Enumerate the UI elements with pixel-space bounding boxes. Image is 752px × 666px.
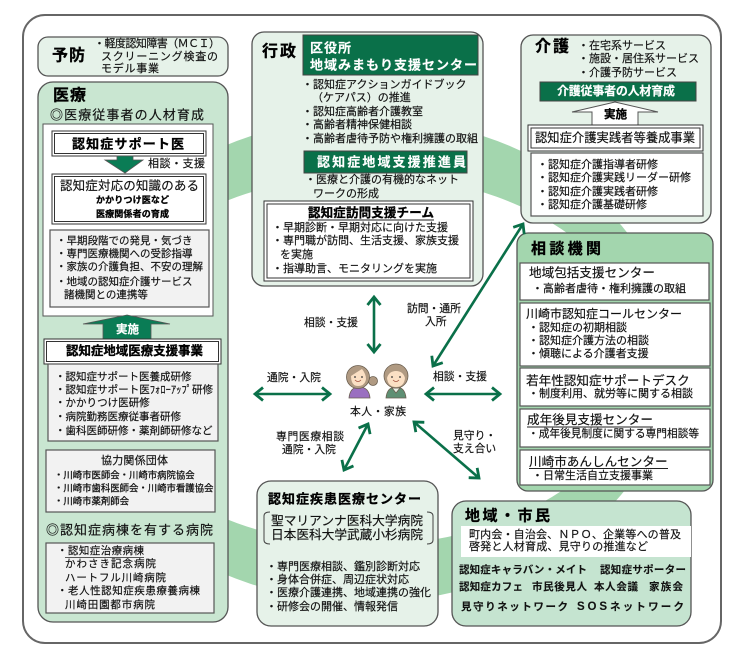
panel: nursing care [521,35,711,223]
list: roles of support doctors: 諸機関との連携等 [64,288,148,301]
box: dementia support doctor [52,131,206,156]
text: prevention details [94,36,220,75]
list: administration services: （ケアパス）の推進 [312,90,411,104]
text: promoter role: ワークの形成 [313,187,379,200]
panel: administration [252,32,483,286]
arrow: person to community [414,422,479,478]
list: center functions: ・研修会の開催、情報発信 [266,599,398,613]
text: prevention details: スクリーニング検査の [101,49,218,63]
arrow: consultation agencies to person [433,224,523,366]
list: medical training courses [48,364,218,441]
text: prevention details: モデル事業 [101,61,159,75]
text: community activities [461,526,691,557]
box: dementia visiting support team: ・指導助言、モニタリングを実施 [272,261,437,275]
background ring [61,118,673,602]
list: center functions: ・専門医療相談、鑑別診断対応 [266,559,420,573]
list: hospitals: ・認知症治療病棟 [57,544,144,557]
panel: community and citizens [452,501,691,626]
panel: medical care [38,82,228,622]
text: promoter role: ・医療と介護の有機的なネット [305,172,459,186]
icon: elderly woman [346,366,378,398]
list: center functions: ・身体合併症、周辺症状対応 [266,572,409,586]
box: dementia call center [520,303,710,366]
banner: care worker training: 介護従事者の人材育成 [557,83,675,98]
banner: ward office community center: 区役所 [310,40,351,56]
arrow: implementation: 実施 [604,107,627,121]
arrow: person to consultation agencies [426,393,500,395]
panel: prevention [38,36,228,76]
list: administration services: ・高齢者精神保健相談 [302,117,412,131]
list: partner organizations: 協力関係団体 [101,453,168,467]
list: medical training courses: ・歯科医師研修・薬剤師研修など [55,424,213,437]
label: specialist consultation: 専門医療相談 [276,429,344,443]
white panel: dementia support doctor [43,124,213,316]
heading: administration: 行政 [262,42,296,60]
box: dementia visiting support team: 認知症訪問支援チーム [308,205,434,220]
list: center functions: ・医療介護連携、地域連携の強化 [266,585,431,599]
label: visits and admission: 訪問・通所 [407,302,461,315]
list: community programs: 市民後見人 [532,580,588,593]
list: partner organizations: ・川崎市医師会・川崎市病院協会 [54,470,195,480]
box: regional dementia medical support program [44,339,221,364]
box: training of family doctors: 認知症対応の知識のある [60,179,199,193]
box: anshin center: 川崎市あんしんセンター [529,455,668,469]
box: adult guardianship support center: ・成年後見制度に関する専門相談等 [528,427,699,440]
box: anshin center [520,450,710,485]
heading: prevention: 予防 [52,46,85,64]
box: dementia call center: 川崎市認知症コールセンター [526,307,682,321]
list: administration services: ・高齢者虐待予防や権利擁護の取組 [302,131,478,145]
label: visits and admission [407,302,461,328]
box: early-onset dementia support desk [520,368,710,406]
list: roles of support doctors: ・専門医療機関への受診指導 [56,247,193,260]
banner: dementia community support promoter [304,151,467,173]
box: dementia visiting support team: ・早期診断・早期対応に向けた支援 [272,220,448,234]
label: visits and admission: 入所 [425,315,447,328]
heading: medical care: 医療 [53,86,86,104]
label: watching over and mutual support: 見守り・ [453,429,496,442]
list: medical training courses: ・かかりつけ医研修 [55,396,150,409]
heading: nursing care: 介護 [535,38,569,56]
text: designated hospitals: 日本医科大学武蔵小杉病院 [271,527,423,542]
list: hospitals: 川崎田園都市病院 [65,598,156,611]
list: community programs: 家族会 [649,580,684,593]
box: early-onset dementia support desk: 若年性認知症サポートデスク [526,373,690,388]
text: community activities: 町内会・自治会、ＮＰＯ、企業等への普及 [469,527,681,541]
list: community programs: SOS [577,601,607,613]
list: partner organizations: ・川崎市薬剤師会 [54,496,130,506]
list: roles of support doctors: ・家族の介護負担、不安の理解 [56,260,203,273]
list: medical training courses: ・認知症サポート医養成研修 [55,370,192,383]
label: specialist consultation [276,429,344,456]
heading: community and citizens: 地域・市民 [465,506,550,524]
list: care training courses: ・認知症介護実践リーダー研修 [537,170,691,184]
box: dementia visiting support team: を実施 [280,248,313,261]
list: care training courses: ・認知症介護基礎研修 [537,197,647,211]
list: community programs: 見守りネットワーク [461,600,568,613]
box: dementia visiting support team [264,201,473,281]
list: care training courses: ・認知症介護実践者研修 [537,184,658,198]
box: community general support center: ・高齢者虐待・権利擁護の取組 [532,281,686,295]
banner: ward office community center [303,35,478,75]
panel: dementia medical center [257,481,438,626]
list: administration services: ・認知症アクションガイドブック [302,77,466,91]
label: outpatient and admission, left: 通院・入院 [267,371,321,384]
box: dementia call center: ・認知症介護方法の相談 [528,333,649,347]
banner: ward office community center: 地域みまもり支援センター [310,58,477,72]
arrow: administration to person [373,297,375,352]
list: roles of support doctors: ・地域の認知症介護サービス [56,275,192,288]
banner: care worker training [540,82,696,101]
arrow: implementation up: 実施 [116,322,139,336]
box: community general support center: 地域包括支援センター [529,266,655,280]
list: care services: ・施設・居住系サービス [578,51,699,65]
list: administration services [302,77,478,145]
subheading: hospitals with dementia wards: ◎認知症病棟を有する病院 [46,522,213,538]
arrow: implementation [572,102,658,125]
list: care services: ・介護予防サービス [578,65,677,79]
arrow: down to family doctors [105,156,143,173]
label: consultation and support, right: 相談・支援 [433,369,487,383]
box: training of family doctors [52,174,206,224]
banner: dementia community support promoter: 認知症地域支援推進員 [317,154,466,170]
box: dementia call center: ・傾聴による介護者支援 [528,346,649,360]
label: specialist consultation: 通院・入院 [282,443,336,456]
label: watching over and mutual support [453,429,496,455]
box: dementia support doctor: 認知症サポート医 [72,136,184,152]
box: community general support center [520,263,709,300]
arrow: person to medical center [344,424,368,470]
text: designated hospitals [264,512,433,544]
text: promoter role [305,172,459,200]
box: training of family doctors: かかりつけ医など [96,194,169,205]
list: care training courses [531,153,703,216]
box: dementia visiting support team: ・専門職が訪問、生活支援、家族支援 [272,233,459,247]
list: hospitals: ハートフル川崎病院 [65,571,166,584]
label: person and family: 本人・家族 [350,404,406,418]
list: roles of support doctors [50,230,209,307]
subheading: medical staff training: ◎医療従事者の人材育成 [50,108,204,122]
box: anshin center: ・日常生活自立支援事業 [532,468,653,482]
list: medical training courses: ・病院勤務医療従事者研修 [55,410,181,423]
box: regional dementia medical support program: 認知症地域医療支援事業 [66,343,203,358]
list: care services [578,39,699,79]
list: partner organizations [46,450,215,512]
box: adult guardianship support center: 成年後見支援センター [527,413,653,427]
icon: elderly man [384,364,408,398]
label: consultation and support, top: 相談・支援 [304,315,358,329]
list: hospitals: ・老人性認知症疾患療養病棟 [57,584,200,597]
box: dementia care practitioner program [528,125,703,151]
label: consultation and support: 相談・支援 [148,156,205,170]
list: community programs: 認知症カフェ [459,580,523,593]
box: adult guardianship support center [520,409,710,447]
list: community programs: 認知症サポーター [600,563,686,576]
text: prevention details: ・軽度認知障害（ＭＣＩ） [94,36,220,50]
list: partner organizations: ・川崎市歯科医師会・川崎市看護協会 [54,482,214,494]
list: community programs: ネットワーク [610,601,684,613]
heading: consultation agencies: 相談機関 [531,240,601,258]
list: medical training courses: ・認知症サポート医ﾌｫﾛｰｱｯﾌﾟ研修 [55,383,214,396]
list: hospitals [46,543,214,613]
list: community programs: 認知症キャラバン・メイト [459,563,587,576]
text: community activities: 啓発と人材育成、見守りの推進など [469,539,648,553]
list: center functions [266,559,431,613]
label: watching over and mutual support: 支え合い [453,442,496,455]
box: dementia care practitioner program: 認知症介護実践者等養成事業 [535,130,695,145]
arrow: medical care to person [255,393,330,395]
list: community programs [459,563,686,613]
panel: consultation agencies [517,233,713,491]
list: care training courses: ・認知症介護指導者研修 [537,157,658,171]
text: designated hospitals: 聖マリアンナ医科大学病院 [271,513,423,528]
box: training of family doctors: 医療関係者の育成 [96,208,169,219]
box: early-onset dementia support desk: ・制度利用、就労等に関する相談 [528,386,693,400]
box: dementia call center: ・認知症の初期相談 [528,320,627,334]
arrow: implementation up [83,315,170,339]
list: roles of support doctors: ・早期段階での発見・気づき [56,234,192,247]
list: care services: ・在宅系サービス [578,39,666,52]
list: hospitals: かわさき記念病院 [65,558,156,570]
list: community programs: 本人会議 [594,580,638,593]
heading: dementia medical center: 認知症疾患医療センター [268,492,421,506]
list: administration services: ・認知症高齢者介護教室 [302,104,423,118]
